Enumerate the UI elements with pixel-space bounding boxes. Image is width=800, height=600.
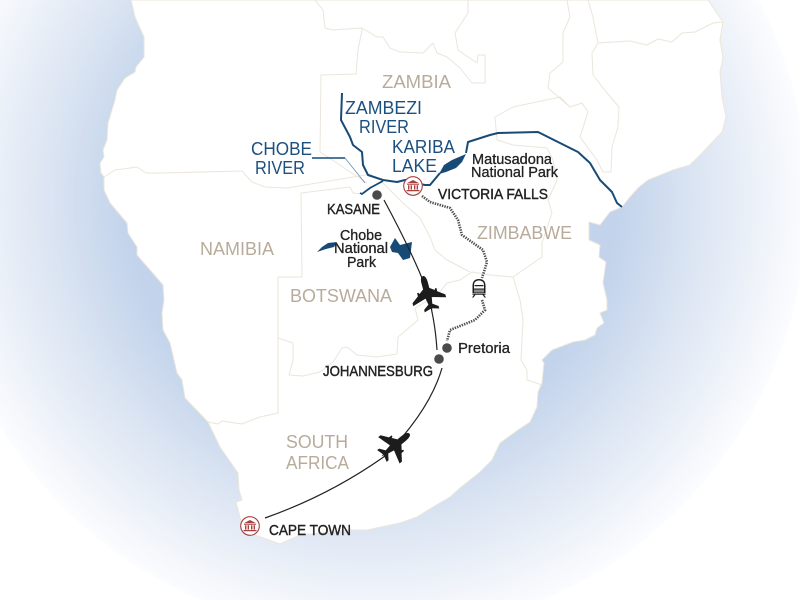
- label: cape town: CAPE TOWN: [269, 523, 351, 539]
- label: kariba lake: KARIBA: [392, 136, 456, 157]
- label: matusadona national park: National Park: [471, 165, 559, 181]
- label: zambezi river: [345, 97, 422, 137]
- kariba lake: [439, 154, 466, 174]
- label: matusadona national park: Matusadona: [472, 152, 553, 168]
- icon: train: [472, 279, 486, 298]
- country borders: [104, 0, 723, 424]
- label: chobe river: CHOBE: [251, 138, 312, 159]
- label: chobe national park: Park: [347, 255, 377, 271]
- label: chobe national park: National: [334, 241, 388, 257]
- country label: south africa: [286, 431, 350, 473]
- marker: johannesburg: [434, 354, 444, 364]
- icon: plane south: [371, 420, 420, 470]
- label: zambezi river: ZAMBEZI: [345, 97, 422, 118]
- label: chobe national park: Chobe: [340, 228, 382, 244]
- label: pretoria: Pretoria: [458, 341, 511, 357]
- label: matusadona national park: [471, 152, 559, 181]
- railway: train to pretoria: [447, 300, 485, 341]
- land mass: [100, 0, 726, 544]
- country label: botswana: BOTSWANA: [290, 285, 393, 306]
- label: chobe river: RIVER: [255, 157, 305, 178]
- label: kariba lake: LAKE: [392, 155, 437, 176]
- country label: zimbabwe: ZIMBABWE: [477, 222, 572, 243]
- label: victoria falls: VICTORIA FALLS: [438, 187, 548, 203]
- icon: victoria falls museum: [404, 177, 422, 195]
- label: zambezi river: RIVER: [359, 116, 409, 137]
- marker: kasane: [372, 190, 382, 200]
- country label: south africa: AFRICA: [286, 452, 350, 473]
- chobe river with leader: [312, 158, 383, 194]
- icon: plane north: [406, 272, 449, 315]
- label: chobe national park: [334, 228, 388, 271]
- marker: pretoria: [442, 343, 452, 353]
- flight route: kasane to johannesburg: [384, 200, 437, 350]
- railway: victoria falls to train: [422, 196, 487, 278]
- country label: south africa: SOUTH: [286, 431, 348, 452]
- label: chobe river: [251, 138, 312, 178]
- country label: zambia: ZAMBIA: [382, 71, 452, 92]
- flight route: johannesburg to cape town: [265, 368, 442, 518]
- zambezi river: [341, 93, 622, 207]
- country label: namibia: NAMIBIA: [200, 238, 275, 259]
- label: kariba lake: [392, 136, 456, 176]
- label: johannesburg: JOHANNESBURG: [323, 364, 433, 380]
- label: kasane: KASANE: [327, 202, 380, 218]
- chobe national park shapes: [317, 238, 412, 260]
- icon: cape town museum: [241, 517, 259, 535]
